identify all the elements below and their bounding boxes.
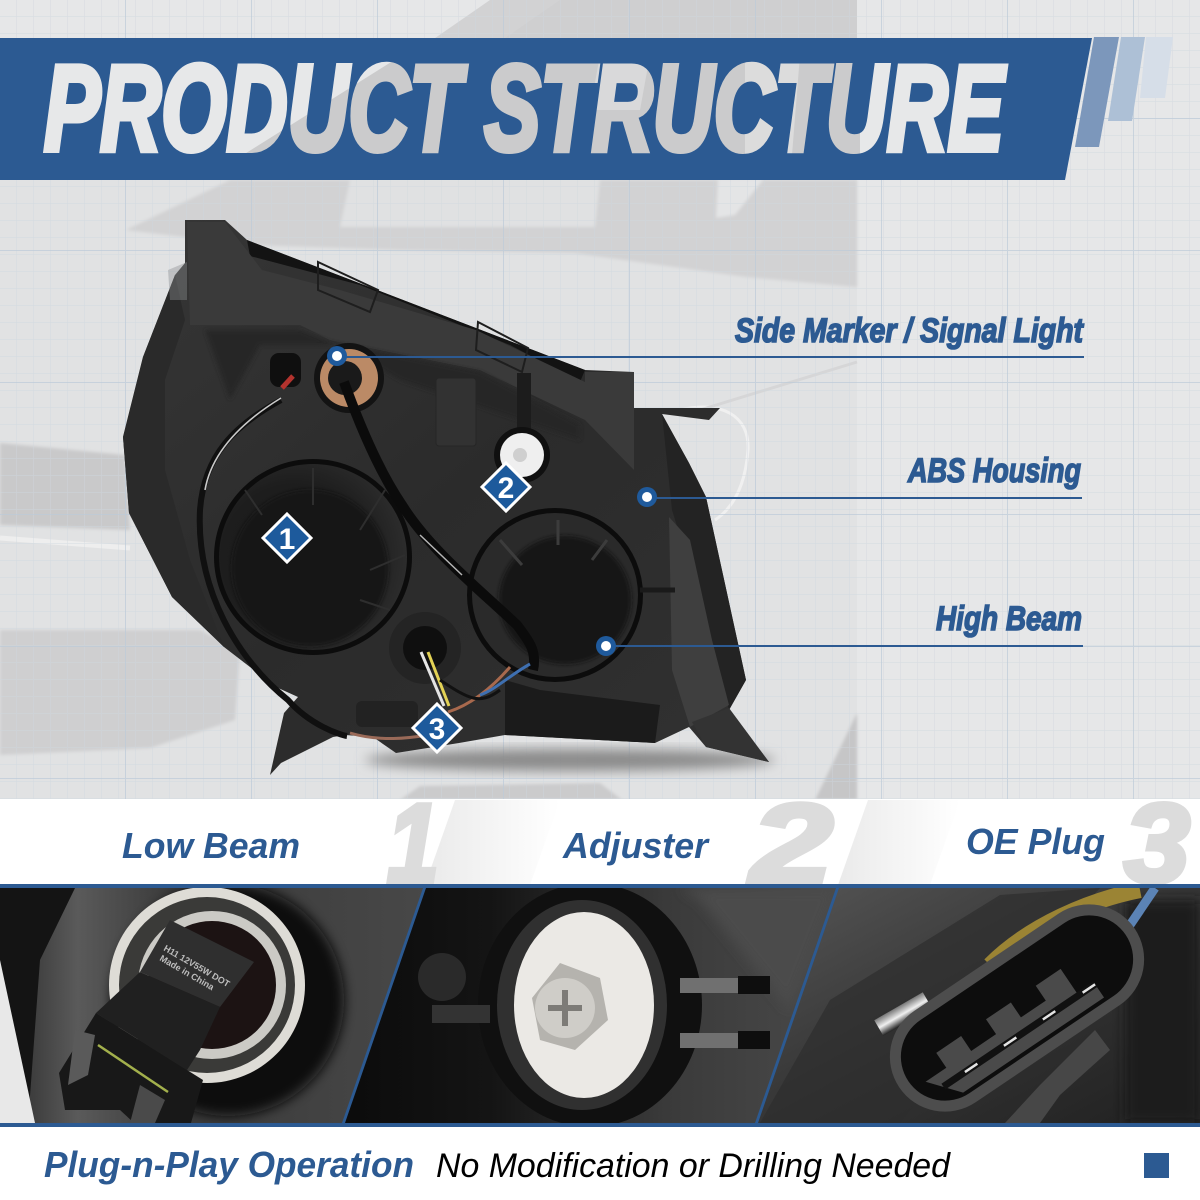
caption: adjuster: Adjuster xyxy=(562,825,710,866)
footer square xyxy=(1144,1153,1169,1178)
vertical rib xyxy=(517,373,531,437)
caption: low beam: Low Beam xyxy=(122,825,300,866)
headlight shadow xyxy=(365,749,775,771)
callout line: ABS housing xyxy=(637,487,1082,507)
label: high beam: High Beam xyxy=(936,600,1082,638)
thick wire highlight xyxy=(420,535,462,575)
high beam dome xyxy=(467,508,675,682)
marker 3 xyxy=(413,704,461,752)
low beam dome xyxy=(214,459,412,655)
OE plug on housing xyxy=(356,701,418,727)
yellow wire xyxy=(990,890,1140,965)
top lip xyxy=(247,240,585,382)
faded number 2: 2 xyxy=(748,781,833,906)
label: side marker: Side Marker / Signal Light xyxy=(735,312,1084,350)
footer xyxy=(0,1127,1200,1200)
label: ABS housing: ABS Housing xyxy=(907,452,1081,490)
lower ribs block xyxy=(505,680,660,743)
photo: adjuster bolt xyxy=(340,883,840,1127)
headlight rear view xyxy=(123,220,769,775)
clip one xyxy=(318,262,378,312)
right ribbed wall xyxy=(669,517,729,727)
right lens edge xyxy=(662,414,746,710)
wiring harness xyxy=(350,652,530,739)
photo: low beam bulb socket: Made in China xyxy=(158,953,217,993)
clip two xyxy=(476,322,528,372)
photo: low beam bulb socket xyxy=(0,884,430,1124)
foot bracket xyxy=(692,708,769,762)
marker 3: 3 xyxy=(429,713,445,746)
metal pin xyxy=(874,992,932,1036)
tabs xyxy=(432,976,770,1049)
photo: OE plug xyxy=(755,883,1200,1133)
side connector xyxy=(270,353,301,388)
marker 1: 1 xyxy=(279,523,295,556)
photo frame lines xyxy=(0,884,1200,1127)
hex bolt xyxy=(532,963,608,1050)
housing silhouette xyxy=(123,220,769,775)
adjuster cap xyxy=(494,427,550,483)
caption: OE plug: OE Plug xyxy=(966,821,1105,862)
marker 2 xyxy=(482,463,530,511)
faded number 1: 1 xyxy=(387,781,439,906)
background: blueprint paper with faded car xyxy=(0,0,1200,800)
callout line: high beam xyxy=(596,636,1083,656)
caption strip xyxy=(0,781,1200,906)
chrome slivers on lens xyxy=(168,262,187,300)
bulb markings: H11 12V55W DOT xyxy=(162,943,232,989)
thin wire highlight xyxy=(205,398,281,490)
outer lens rim xyxy=(123,275,224,647)
thin wire xyxy=(200,400,347,736)
lower tab xyxy=(1005,1030,1110,1123)
accent stripes xyxy=(1075,37,1173,147)
callout line: side marker xyxy=(327,346,1084,366)
main thick wire xyxy=(344,382,534,670)
pocket shadow under ledge xyxy=(205,330,580,440)
bulb connector xyxy=(59,920,254,1123)
footer tagline: No Modification or Drilling Needed xyxy=(436,1147,951,1185)
rectangular boss xyxy=(436,378,476,446)
upper ledge xyxy=(187,222,634,470)
plug shell xyxy=(890,904,1144,1112)
blue wire xyxy=(1130,888,1155,925)
marker 1 xyxy=(263,514,311,562)
copper ring socket xyxy=(314,343,384,413)
footer heading: Plug-n-Play Operation xyxy=(44,1144,414,1185)
faded number 3: 3 xyxy=(1124,781,1190,906)
marker 2: 2 xyxy=(498,472,514,505)
title banner xyxy=(0,38,1092,180)
rubber grommet xyxy=(389,612,461,684)
